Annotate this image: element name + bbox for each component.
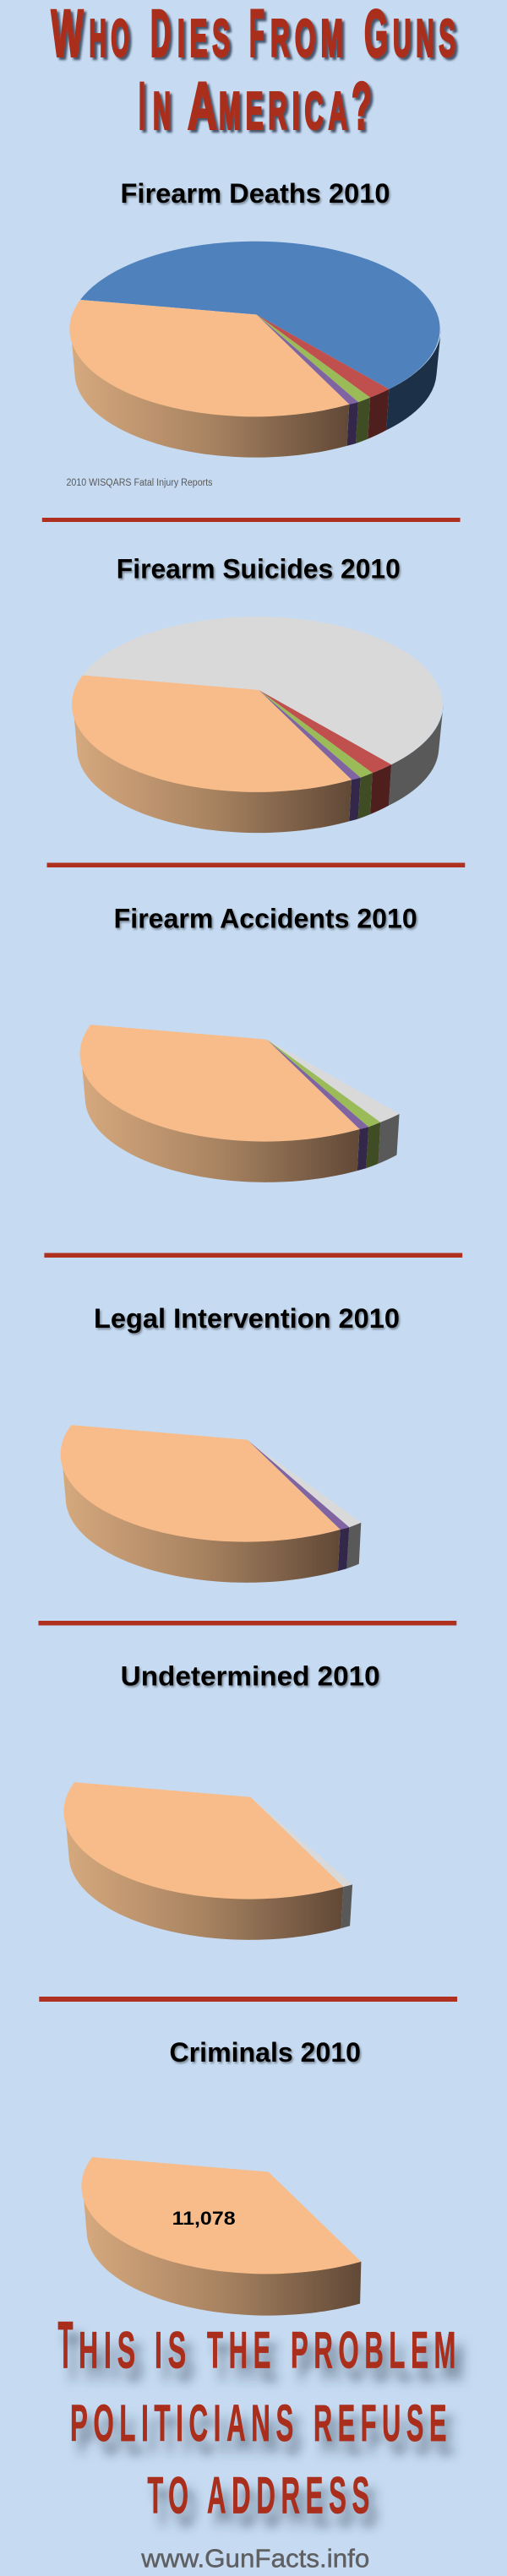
slice top: gray (83, 617, 442, 764)
slice top: peach (63, 1782, 343, 1899)
pie chart: criminals (81, 2157, 361, 2316)
slice top: peach (81, 2157, 361, 2274)
slice side: purple (338, 1527, 349, 1571)
title: Who Dies From Guns In America?: ROM (270, 10, 348, 68)
pie chart: firearm accidents (79, 1024, 400, 1182)
pie chart: firearm deaths (69, 242, 441, 458)
slice top: green (257, 314, 370, 402)
pie chart: undetermined (63, 1782, 352, 1940)
slice top: red (259, 690, 391, 773)
title: Who Dies From Guns In America?: N (153, 83, 171, 141)
slice top: purple (248, 1440, 349, 1530)
slice side: purple (357, 1127, 368, 1171)
closing statement: This is the problem politicians refuse to address: TO (147, 2466, 194, 2524)
title: Who Dies From Guns In America?: MERICA (219, 83, 352, 141)
slice top: peach (79, 1024, 360, 1142)
slice side: purple (347, 402, 358, 446)
slice side: red (368, 389, 389, 439)
slice top: green (259, 690, 373, 778)
slice top: purple (259, 690, 361, 780)
slice side: red (370, 764, 391, 814)
closing statement: This is the problem politicians refuse to address: T (57, 2307, 73, 2382)
title: Who Dies From Guns In America? (51, 0, 461, 144)
title: Who Dies From Guns In America?: HO (90, 10, 134, 68)
slice top: purple (267, 1040, 368, 1129)
slice side: purple (349, 778, 361, 821)
slice top: green (267, 1040, 380, 1127)
slice side: peach (83, 2186, 361, 2316)
slice side: gray (379, 1114, 400, 1164)
closing statement: This is the problem politicians refuse to address: THE (207, 2321, 276, 2378)
slice side: green (358, 773, 373, 819)
title: Who Dies From Guns In America?: IES (177, 10, 235, 68)
closing statement: This is the problem politicians refuse to address (57, 2307, 461, 2524)
slice side: gray (389, 704, 444, 806)
slice side: others (386, 329, 441, 430)
slice side: green (366, 1122, 380, 1168)
title: Who Dies From Guns In America?: A (188, 68, 217, 144)
slice top: blue (80, 242, 440, 389)
closing statement: This is the problem politicians refuse to address: HIS (79, 2321, 141, 2378)
heading: Undetermined 2010: Undetermined 2010 (121, 1660, 380, 1691)
title: Who Dies From Guns In America?: ? (352, 68, 372, 144)
slice top: gray (267, 1040, 400, 1122)
title: Who Dies From Guns In America?: I (139, 68, 145, 144)
slice top: purple (257, 314, 358, 405)
pie chart: legal intervention (61, 1425, 361, 1583)
slice side: gray (346, 1523, 361, 1568)
pie chart: firearm suicides (72, 617, 444, 833)
data label: 11,078: 11,078 (172, 2208, 236, 2229)
slice top: peach (69, 300, 349, 416)
closing statement: This is the problem politicians refuse to address: IS (155, 2321, 192, 2378)
slice top: peach (61, 1425, 341, 1542)
slice top: gray (248, 1440, 361, 1527)
closing statement: This is the problem politicians refuse to address: POLITICIANS (70, 2394, 299, 2452)
slice side: peach (71, 329, 349, 458)
heading: Firearm Deaths 2010: Firearm Deaths 2010 (120, 178, 390, 209)
heading: Firearm Accidents 2010: Firearm Accidents 2010 (114, 904, 417, 934)
slice side: peach (81, 1054, 360, 1182)
heading: Firearm Suicides 2010: Firearm Suicides 2010 (117, 554, 401, 584)
slice side: green (356, 398, 370, 443)
footer: website: www.GunFacts.info (140, 2543, 369, 2573)
slice top: peach (72, 676, 352, 792)
slice side: gray (341, 1884, 352, 1928)
slice top: red (257, 314, 389, 398)
slice side: peach (62, 1454, 341, 1583)
slice side: peach (65, 1812, 343, 1940)
slice side: peach (73, 704, 352, 833)
heading: Legal Intervention 2010: Legal Intervention 2010 (94, 1303, 400, 1334)
source note: 2010 WISQARS Fatal Injury Reports (66, 478, 213, 488)
heading: Criminals 2010: Criminals 2010 (169, 2037, 361, 2068)
slice top: gray (251, 1797, 352, 1887)
